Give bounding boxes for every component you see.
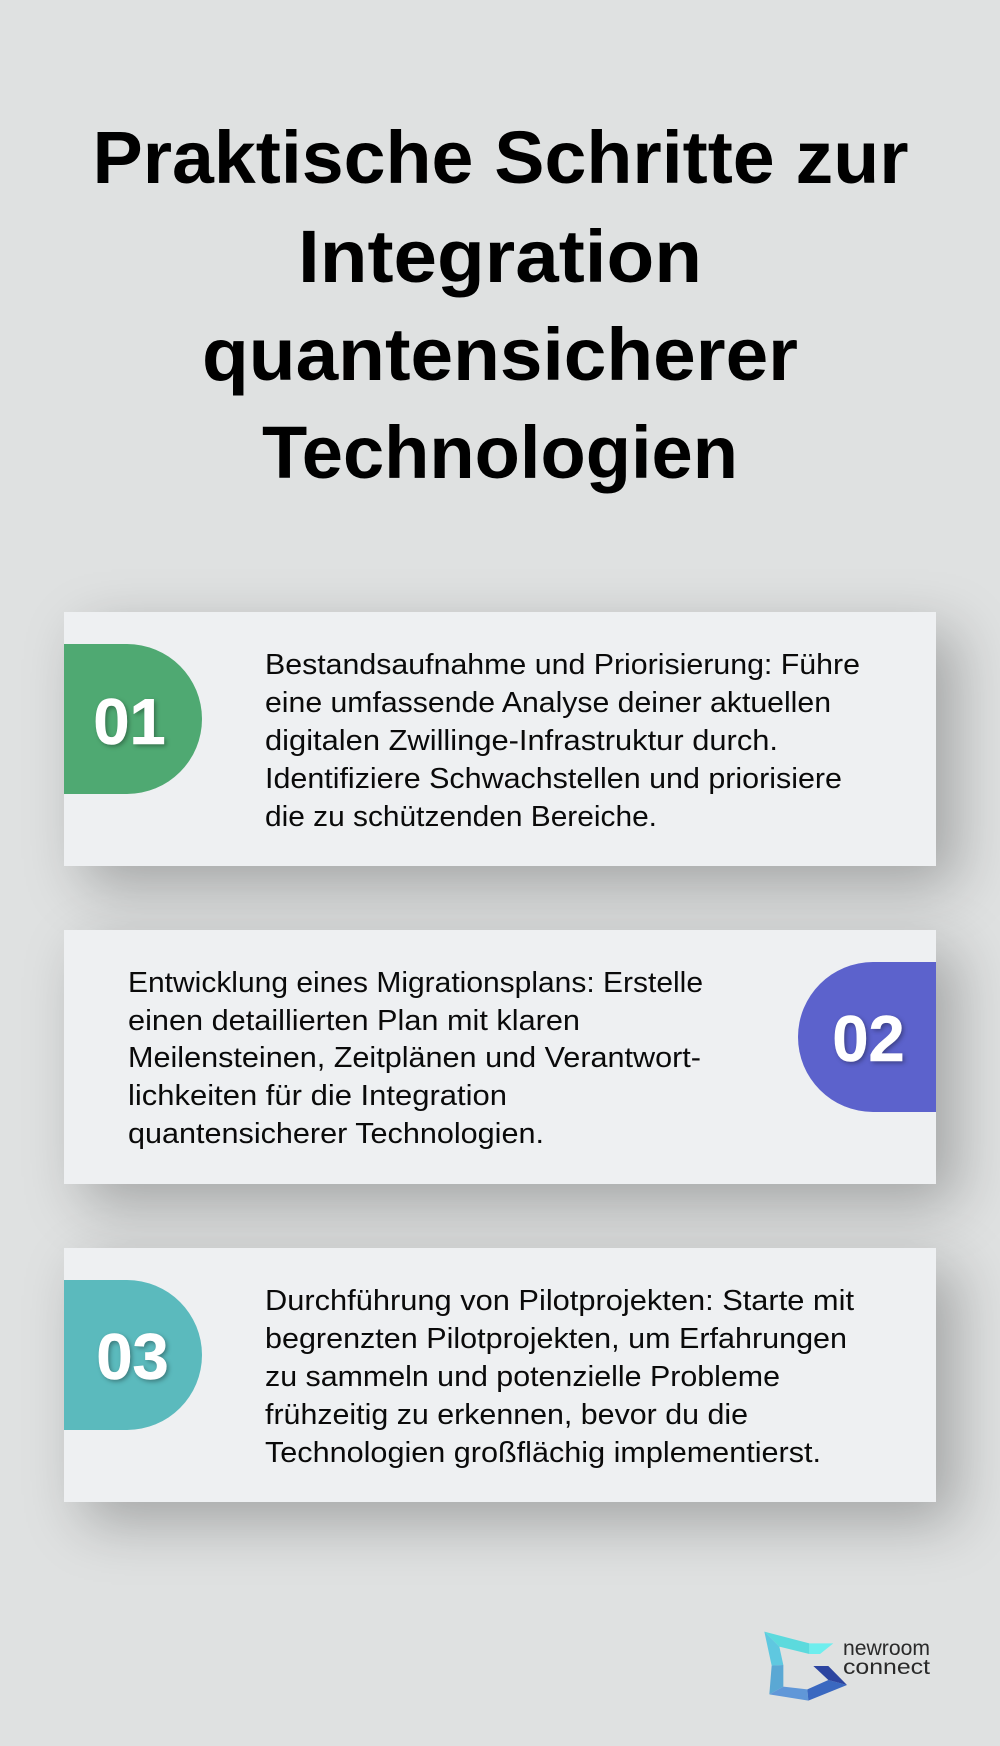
text: step 01 description: Bestandsaufnahme und Priorisierung: Führe: [265, 649, 860, 681]
title: Technologien: [262, 411, 738, 494]
number 02: 02: [832, 1002, 905, 1075]
text: step 01 description: die zu schützenden Bereiche.: [265, 801, 657, 833]
title: Praktische Schritte zur: [92, 116, 908, 199]
title: quantensicherer: [202, 313, 798, 396]
badge: 01: [64, 644, 202, 794]
text: step 02 description: einen detaillierten Plan mit klaren: [128, 1005, 580, 1037]
text: step 02 description: Entwicklung eines Migrationsplans: Erstelle: [128, 967, 703, 999]
text: step 02 description: [128, 967, 703, 1150]
text: step 02 description: lichkeiten für die Integration: [128, 1080, 507, 1112]
badge: 02: [798, 962, 936, 1112]
text: step 01 description: Identifiziere Schwachstellen und priorisiere: [265, 763, 842, 795]
text: step 03 description: zu sammeln und potenzielle Probleme: [265, 1361, 780, 1393]
badge: 03: [64, 1280, 202, 1430]
number 01: 01: [93, 685, 166, 758]
logo wordmark: [843, 1637, 930, 1679]
panel: step 03: [64, 1248, 936, 1502]
text: step 03 description: [265, 1285, 854, 1469]
text: step 03 description: begrenzten Pilotprojekten, um Erfahrungen: [265, 1323, 847, 1355]
text: step 01 description: [265, 649, 860, 833]
text: step 03 description: Technologien großflächig implementierst.: [265, 1437, 821, 1469]
logo wordmark: newroom: [843, 1637, 930, 1660]
text: step 02 description: Meilensteinen, Zeitplänen und Verantwort-: [128, 1042, 701, 1074]
logo wordmark: connect: [843, 1656, 930, 1679]
text: step 03 description: frühzeitig zu erkennen, bevor du die: [265, 1399, 748, 1431]
number 03: 03: [96, 1320, 169, 1393]
panel: step 02: [64, 930, 936, 1184]
text: step 02 description: quantensicherer Technologien.: [128, 1118, 544, 1150]
title: [92, 116, 908, 494]
text: step 01 description: eine umfassende Analyse deiner aktuellen: [265, 687, 831, 719]
title: Integration: [298, 215, 702, 298]
panel: step 01: [64, 612, 936, 866]
text: step 03 description: Durchführung von Pilotprojekten: Starte mit: [265, 1285, 854, 1317]
text: step 01 description: digitalen Zwillinge-Infrastruktur durch.: [265, 725, 778, 757]
icon: logo mark: [764, 1632, 847, 1701]
